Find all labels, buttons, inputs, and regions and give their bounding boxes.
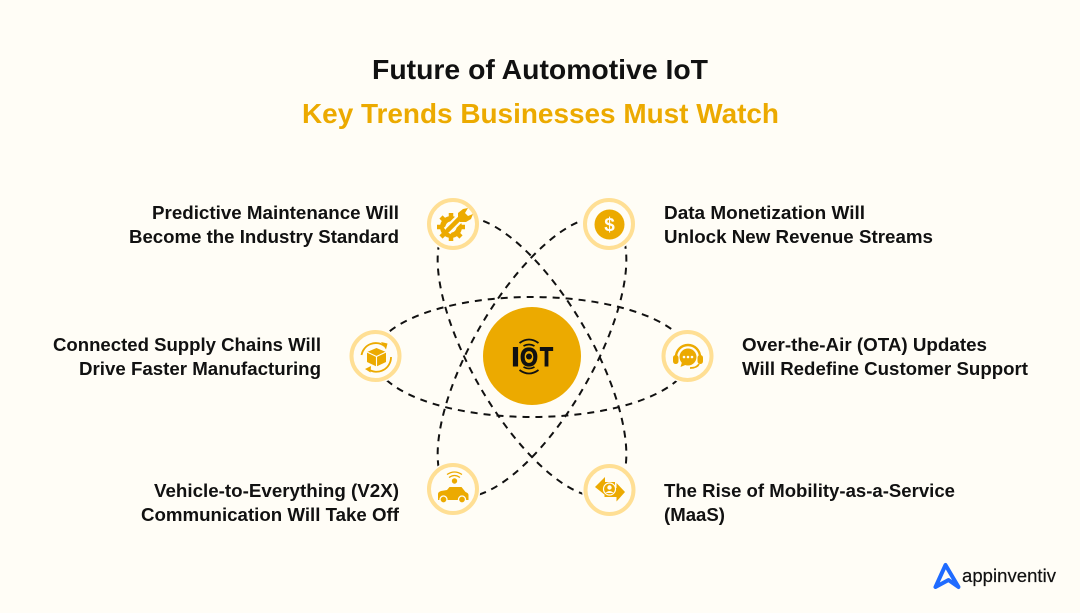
- label: mobility as a service: (MaaS): [664, 505, 725, 525]
- label: mobility as a service: [664, 481, 955, 525]
- icon: supply chain box with arrows: [348, 328, 403, 384]
- centre IoT badge: [483, 307, 581, 405]
- centre IoT badge: T: [540, 342, 553, 372]
- icon: customer support headset: [660, 328, 715, 384]
- label: connected supply chains: [53, 335, 321, 379]
- label: OTA updates: Over-the-Air (OTA) Updates: [742, 335, 987, 355]
- icon: gear and wrench: [426, 196, 480, 252]
- label: data monetization: Data Monetization Will: [664, 203, 865, 223]
- label: V2X communication: Communication Will Take Off: [141, 505, 400, 525]
- title: [302, 54, 779, 129]
- icon: dollar coin: $: [604, 215, 615, 236]
- icon: mobility arrows with person: [582, 462, 637, 518]
- orbit diagram: dashed ellipses: [374, 191, 690, 523]
- label: OTA updates: [742, 335, 1028, 379]
- label: predictive maintenance: Become the Industry Standard: [129, 227, 399, 247]
- icon: connected car: [426, 462, 480, 516]
- centre IoT badge: I: [512, 342, 520, 372]
- centre IoT badge: O: [520, 342, 538, 372]
- label: predictive maintenance: [129, 203, 399, 247]
- label: V2X communication: [141, 481, 400, 525]
- label: connected supply chains: Drive Faster Manufacturing: [79, 359, 321, 379]
- label: connected supply chains: Connected Supply Chains Will: [53, 335, 321, 355]
- label: OTA updates: Will Redefine Customer Support: [742, 359, 1028, 379]
- title: Future of Automotive IoT: [372, 54, 708, 85]
- label: predictive maintenance: Predictive Maintenance Will: [152, 203, 399, 223]
- logo: appinventiv: appinventiv: [962, 565, 1057, 586]
- label: data monetization: [664, 203, 933, 247]
- label: V2X communication: Vehicle-to-Everything (V2X): [154, 481, 399, 501]
- icon: dollar coin: [582, 196, 636, 252]
- label: mobility as a service: The Rise of Mobility-as-a-Service: [664, 481, 955, 501]
- subtitle: Key Trends Businesses Must Watch: [302, 98, 779, 129]
- label: data monetization: Unlock New Revenue Streams: [664, 227, 933, 247]
